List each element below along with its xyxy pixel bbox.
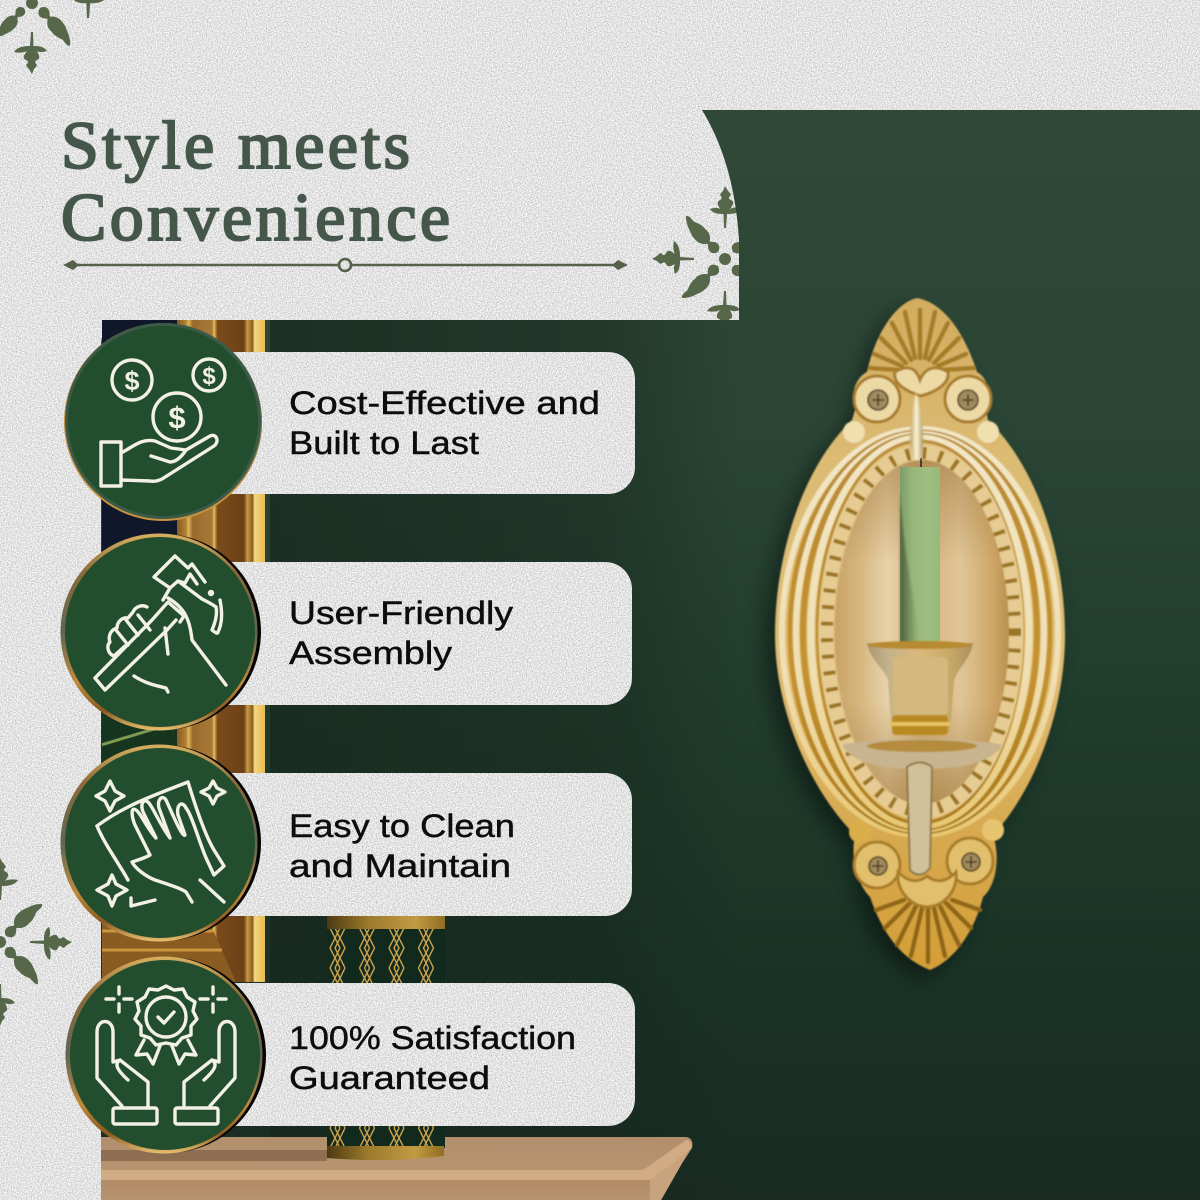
icon disc: money in hand: $: [124, 366, 140, 396]
text: cleaning: and Maintain: [289, 848, 511, 884]
pill: cleaning: [200, 773, 632, 916]
shelf front face: [101, 1150, 689, 1200]
icon disc: money in hand: $: [168, 400, 186, 435]
heading divider: [63, 259, 628, 271]
wooden shelf: [101, 1137, 692, 1200]
ornament: lower left edge: [0, 858, 72, 1026]
heading: [61, 107, 450, 255]
text: assembly: User-Friendly: [289, 595, 513, 631]
glass stem: [907, 762, 932, 875]
text: assembly: [289, 595, 513, 671]
shelf lip side: [650, 1150, 689, 1200]
vase base over shelf: [101, 1126, 445, 1161]
text: cost-effective: [289, 385, 600, 461]
text: satisfaction: 100% Satisfaction: [289, 1020, 576, 1056]
text: cost-effective: Built to Last: [289, 425, 479, 461]
bottom fan ribs: [876, 900, 980, 962]
pill: assembly: [200, 562, 632, 705]
sconce cast shadow: [766, 307, 1056, 979]
recessed oval bowl: [835, 460, 1009, 804]
icon disc: hand wiping with cloth: [60, 744, 261, 942]
ornament: right of heading: [652, 186, 772, 333]
wall shading on left side: [270, 320, 739, 1200]
moulded rings: [782, 429, 1058, 835]
dentil ring: [826, 452, 1016, 812]
glass cup holder: [867, 641, 973, 735]
feature row 2: [60, 534, 632, 730]
text: cost-effective: Cost-Effective and: [289, 385, 600, 421]
screws: [868, 390, 980, 875]
text: cleaning: Easy to Clean: [289, 808, 515, 844]
back plate: [775, 298, 1065, 970]
top fan ribs: [870, 310, 974, 370]
scroll ornaments: [843, 368, 1004, 907]
candle: [900, 458, 940, 644]
feature row 1: [64, 323, 635, 521]
feature row 4: [66, 956, 635, 1154]
pill: satisfaction: [200, 983, 635, 1126]
ornament: top left corner: [0, 0, 107, 74]
heading: Convenience: [61, 179, 450, 255]
sconce body: [775, 298, 1065, 970]
shelf light bevel: [101, 1140, 692, 1180]
feature row 3: [60, 744, 632, 942]
text: cleaning: [289, 808, 515, 884]
text: assembly: Assembly: [289, 635, 452, 671]
shelf top surface: [101, 1137, 692, 1200]
icon disc: money in hand: [64, 323, 262, 521]
icon disc: money in hand: $: [202, 363, 216, 390]
cylindrical lattice vase: [327, 915, 445, 1143]
text: satisfaction: Guaranteed: [289, 1060, 490, 1096]
icon disc: hands with rosette: [66, 956, 266, 1154]
candle sconce: [766, 298, 1065, 979]
heading: Style meets: [61, 107, 410, 183]
icon disc: hand with hammer: [60, 534, 261, 730]
flame: [910, 392, 923, 460]
drip dish: [842, 739, 1002, 769]
text: satisfaction: [289, 1020, 576, 1096]
gold framed mirror: [102, 320, 265, 982]
pill: cost-effective: [200, 352, 635, 494]
